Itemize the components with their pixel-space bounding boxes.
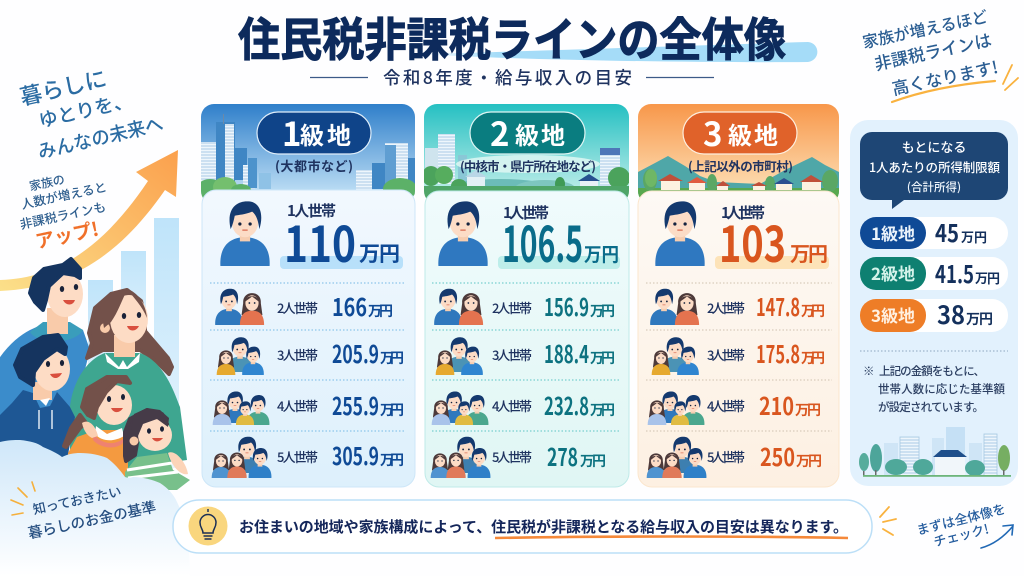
row: 5人世帯: 万円: [796, 451, 822, 471]
row: 2人世帯: 147.8: [756, 288, 800, 323]
header scene: mid-size city: [422, 104, 630, 204]
one-person household: 万円: [359, 238, 400, 268]
row: 4人世帯: 万円: [590, 400, 615, 420]
row: 5人世帯: [277, 437, 404, 472]
row: 2人世帯: 2人世帯: [707, 298, 745, 317]
row: 4人世帯: 万円: [795, 400, 821, 420]
row: 2人世帯: 万円: [801, 301, 825, 321]
row: 2人世帯: 2人世帯: [277, 298, 318, 317]
left illustration: rising bars: [88, 218, 179, 468]
one-person household: 1人世帯: [721, 202, 765, 223]
row: 5人世帯: 305.9: [332, 437, 379, 472]
row: 3級地 38万円: [860, 296, 1008, 332]
left note: family increases: [18, 170, 108, 254]
panel: 1級地: [196, 104, 417, 487]
row: 5人世帯: 万円: [580, 451, 606, 471]
row: 3級地 38万円: 38: [937, 296, 965, 332]
one-person household: 万円: [584, 240, 619, 267]
row: 2級地 41.5万円: 41.5: [935, 255, 974, 290]
left tagline: ゆとりを、: [36, 86, 135, 133]
left note: family increases: 非課税ラインも: [18, 196, 107, 233]
left tagline: [17, 51, 166, 166]
family illustration: [0, 259, 190, 495]
row: 1級地 45万円: 万円: [961, 227, 987, 246]
orange underline: [495, 536, 848, 538]
daughter: [64, 377, 132, 490]
speech bubble: [860, 132, 1008, 209]
row: 2人世帯: 156.9: [544, 288, 589, 323]
row: 4人世帯: 232.8: [544, 387, 589, 422]
row: 5人世帯: 5人世帯: [277, 447, 318, 466]
row: 1級地 45万円: [860, 214, 1008, 249]
one-person household: 1人世帯: [503, 202, 549, 223]
top-right handwritten note: [860, 3, 1018, 102]
speech bubble: 1人あたりの所得制限額: [869, 157, 1000, 176]
row: 1級地 45万円: 1級地: [871, 220, 915, 245]
one-person household: 1人世帯: [287, 200, 336, 221]
icon: light bulb: [188, 506, 228, 546]
top-right handwritten note: 家族が増えるほど: [860, 3, 990, 53]
row: 5人世帯: 万円: [380, 450, 404, 470]
note text: ※: [863, 363, 874, 379]
region label: (中核市・県庁所在地など): [460, 156, 596, 175]
older brother: [0, 335, 75, 460]
row: 5人世帯: [492, 438, 606, 473]
row: 5人世帯: 278: [547, 438, 578, 473]
row: 3人世帯: [277, 335, 404, 370]
row: 3人世帯: [492, 335, 615, 370]
household icons: [212, 289, 271, 478]
left note: family increases: 家族の: [28, 170, 66, 195]
row: 4人世帯: 万円: [380, 400, 404, 420]
row: 4人世帯: 4人世帯: [277, 396, 318, 415]
row: 2人世帯: [707, 288, 825, 323]
left note: family increases: アップ!: [33, 215, 101, 254]
level badge: 級地: [515, 116, 565, 151]
mother: [70, 289, 187, 495]
row: 2人世帯: 万円: [590, 301, 615, 321]
row: 3人世帯: 万円: [380, 348, 404, 368]
level badge: 2: [490, 108, 509, 156]
row: 3人世帯: 188.4: [544, 335, 589, 370]
note text: [863, 363, 1006, 415]
level badge: 級地: [728, 116, 778, 151]
message text: お住まいの地域や家族構成によって、住民税が非課税となる給与収入の目安は異なります。: [239, 516, 848, 537]
one-person household: 106.5: [502, 206, 583, 277]
row: 3人世帯: 3人世帯: [707, 345, 745, 364]
left note: family increases: 人数が増えると: [19, 176, 108, 213]
row: 4人世帯: [492, 387, 615, 422]
region label: (大都市など): [275, 156, 353, 175]
bottom-right note with arrow: まずは全体像を: [914, 498, 1007, 539]
cloud with caption: [0, 440, 190, 576]
row: 2人世帯: 166: [332, 288, 367, 323]
row: 4人世帯: [277, 387, 404, 422]
level badge: [257, 108, 371, 156]
level badge: 級地: [300, 116, 351, 151]
row: 3人世帯: 万円: [590, 348, 615, 368]
row: 3人世帯: 3人世帯: [277, 345, 318, 364]
household icons: [647, 289, 706, 478]
one-person household: [438, 201, 620, 277]
note text: 上記の金額をもとに、: [879, 363, 985, 379]
cloud with caption: 暮らしのお金の基準: [26, 496, 158, 543]
row: 3人世帯: 3人世帯: [492, 345, 532, 364]
bottom message bar: [173, 500, 872, 553]
level badge: [683, 108, 797, 156]
small child: [125, 408, 190, 490]
one-person household: 103: [719, 206, 786, 277]
town illustration: [859, 427, 1011, 477]
note text: 世帯人数に応じた基準額: [878, 381, 1006, 397]
sparks near message: [880, 507, 896, 535]
row: 4人世帯: 255.9: [332, 387, 379, 422]
left tagline: みんなの未来へ: [35, 109, 166, 164]
speech bubble: (合計所得): [907, 179, 961, 195]
header scene: mountains and houses: [638, 104, 839, 204]
row: 3人世帯: 万円: [801, 348, 825, 368]
one-person household: [220, 200, 403, 277]
row: 5人世帯: 5人世帯: [492, 447, 532, 466]
row: 5人世帯: [707, 438, 822, 473]
row: 4人世帯: 4人世帯: [707, 396, 745, 415]
row: 2級地 41.5万円: [860, 255, 1008, 290]
header scene: city: [196, 104, 417, 204]
row: 2人世帯: 2人世帯: [492, 298, 532, 317]
top-right handwritten note: 高くなります!: [889, 53, 1000, 100]
father: [0, 259, 90, 420]
white data panel: [425, 191, 629, 487]
row: 3級地 38万円: 万円: [966, 309, 993, 329]
row: 4人世帯: [707, 387, 821, 422]
row: 4人世帯: 210: [759, 387, 794, 422]
bottom-right note with arrow: チェック!: [931, 518, 991, 551]
region label: (上記以外の市町村): [688, 156, 793, 175]
row: 3級地 38万円: 3級地: [871, 302, 915, 327]
panel: income limit: [850, 120, 1018, 486]
row: 3人世帯: 175.8: [756, 335, 800, 370]
level badge: 1: [282, 108, 301, 156]
arrow: rising orange arrow: [0, 150, 178, 291]
row: 2人世帯: 万円: [368, 301, 393, 321]
row: 2人世帯: [277, 288, 393, 323]
row: 1級地 45万円: 45: [935, 214, 959, 249]
row: 4人世帯: 4人世帯: [492, 396, 532, 415]
panel: 3級地: [638, 104, 839, 487]
white data panel: [202, 190, 415, 487]
note text: が設定されています。: [878, 399, 984, 415]
top-right handwritten note: 非課税ラインは: [872, 26, 993, 75]
speech bubble: もとになる: [902, 137, 966, 156]
title: 住民税非課税ラインの全体像: [238, 4, 786, 70]
panel: 2級地: [422, 104, 630, 487]
white data panel: [638, 191, 839, 487]
level badge: [470, 108, 585, 156]
subtitle: 令和8年度・給与収入の目安: [383, 65, 632, 90]
one-person household: 110: [284, 206, 356, 277]
row: 2級地 41.5万円: 2級地: [871, 260, 915, 285]
left tagline: 暮らしに: [17, 61, 110, 112]
row: 2級地 41.5万円: 万円: [975, 268, 1000, 287]
level badge: 3: [703, 108, 722, 156]
row: 2人世帯: [492, 288, 615, 323]
one-person household: [655, 201, 829, 277]
one-person household: 万円: [790, 238, 828, 267]
row: 3人世帯: 205.9: [332, 335, 379, 370]
row: 5人世帯: 5人世帯: [707, 447, 745, 466]
household icons: [431, 289, 490, 478]
cloud with caption: 知っておきたい: [31, 481, 123, 518]
row: 5人世帯: 250: [760, 438, 795, 473]
row: 3人世帯: [707, 335, 825, 370]
